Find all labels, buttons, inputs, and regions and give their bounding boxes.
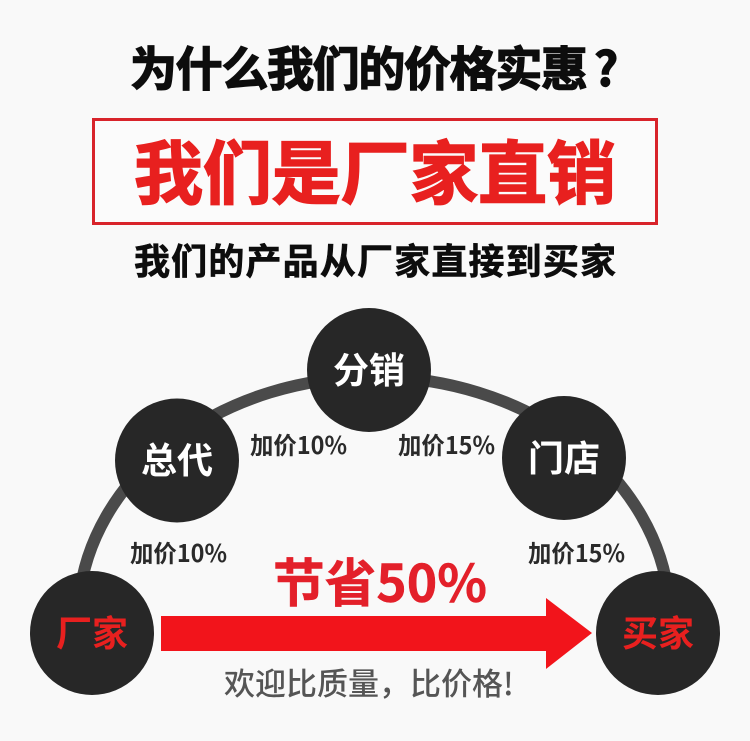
headline: 我们是厂家直销 — [134, 118, 616, 218]
node: store — [502, 396, 626, 520]
node: buyer — [596, 571, 720, 695]
node: factory — [30, 571, 154, 695]
markup label: distributor to store: 加价15% — [398, 426, 495, 461]
title: ? — [594, 31, 618, 100]
node: distributor: 分销 — [333, 342, 405, 394]
node: general agent — [115, 398, 239, 522]
savings text: 节省50% — [273, 542, 487, 617]
node: store: 门店 — [528, 430, 600, 482]
node: distributor — [307, 308, 431, 432]
subtitle: 我们的产品从厂家直接到买家 — [134, 233, 616, 285]
title: 为什么我们的价格实惠 — [130, 31, 588, 100]
markup label: factory to agent: 加价10% — [130, 534, 227, 569]
node: general agent: 总代 — [141, 432, 213, 484]
markup label: agent to distributor: 加价10% — [250, 426, 347, 461]
arrow: factory to buyer — [161, 598, 592, 669]
node: factory: 厂家 — [56, 605, 128, 657]
arc connector — [79, 377, 669, 600]
markup label: store to buyer: 加价15% — [528, 534, 625, 569]
node: buyer: 买家 — [622, 605, 694, 657]
slogan: 欢迎比质量，比价格! — [224, 659, 514, 704]
panel: headline box — [94, 118, 656, 224]
